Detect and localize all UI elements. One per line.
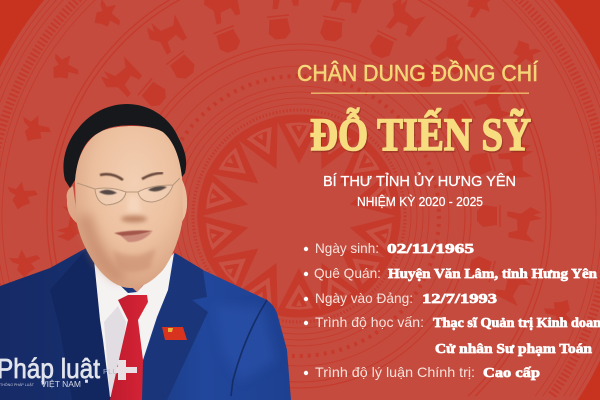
- row: political theory: Cao cấp: [483, 366, 540, 381]
- role: BÍ THƯ TỈNH ỦY HƯNG YÊN: [323, 172, 516, 190]
- name: Đỗ Tiến Sỹ: ĐỖ TIẾN SỸ: [311, 108, 532, 162]
- row: hometown: [304, 265, 597, 282]
- face: [75, 126, 183, 288]
- row: hometown: Quê Quán:: [314, 265, 381, 281]
- row: date of birth: [304, 240, 474, 257]
- mouth: [114, 230, 153, 242]
- plus text: PLUS: [103, 367, 123, 376]
- tiny tagline: THÔNG PHÁP LUẬT: [0, 382, 34, 387]
- sleeve highlight: [215, 305, 276, 382]
- bio list: [304, 240, 600, 381]
- heading: Chân dung đồng chí: CHÂN DUNG ĐỒNG CHÍ: [297, 59, 538, 86]
- row: education: Trình độ học vấn:: [315, 314, 424, 330]
- shirt: [94, 253, 174, 397]
- row: political theory: [304, 364, 540, 381]
- left lapel: [50, 247, 110, 400]
- row: political theory: Trình độ lý luận Chính trị:: [315, 364, 475, 380]
- term: NHIỆM KỲ 2020 - 2025: [357, 194, 483, 209]
- chin shadow: [112, 248, 156, 272]
- tie: [110, 295, 148, 400]
- jaw shading: [78, 215, 128, 282]
- sleeve seam: [231, 300, 267, 396]
- suit jacket: [0, 247, 291, 400]
- neck: [95, 248, 175, 292]
- eyebrows: [100, 173, 163, 180]
- row: party admission: [304, 290, 497, 307]
- glasses: [77, 178, 180, 205]
- watermark logo: Pháp luật Plus Việt Nam: [0, 353, 137, 389]
- row: party admission: 12/7/1993: [422, 292, 497, 307]
- row: education: Cử nhân Sư phạm Toán: [435, 342, 592, 357]
- nose: [121, 196, 147, 222]
- party pin: [162, 327, 187, 340]
- heading divider: [311, 92, 529, 94]
- ear right: [180, 178, 187, 224]
- eyes: [99, 186, 167, 195]
- row: party admission: Ngày vào Đảng:: [315, 290, 413, 306]
- hair: [63, 104, 186, 188]
- right lapel: [132, 253, 208, 400]
- row: date of birth: Ngày sinh:: [315, 240, 379, 256]
- row: education: [304, 314, 600, 357]
- subtitle Việt Nam: VIỆT NAM: [41, 380, 81, 389]
- row: date of birth: 02/11/1965: [387, 242, 474, 257]
- plus cross: [116, 360, 137, 380]
- portrait of the official: [0, 104, 291, 400]
- ear left: [67, 186, 78, 224]
- wordmark: Pháp luật: [0, 353, 100, 384]
- name: Đỗ Tiến Sỹ: ĐỖ TIẾN SỸ: [310, 107, 531, 161]
- row: hometown: Huyện Văn Lâm, tỉnh Hưng Yên: [388, 267, 597, 282]
